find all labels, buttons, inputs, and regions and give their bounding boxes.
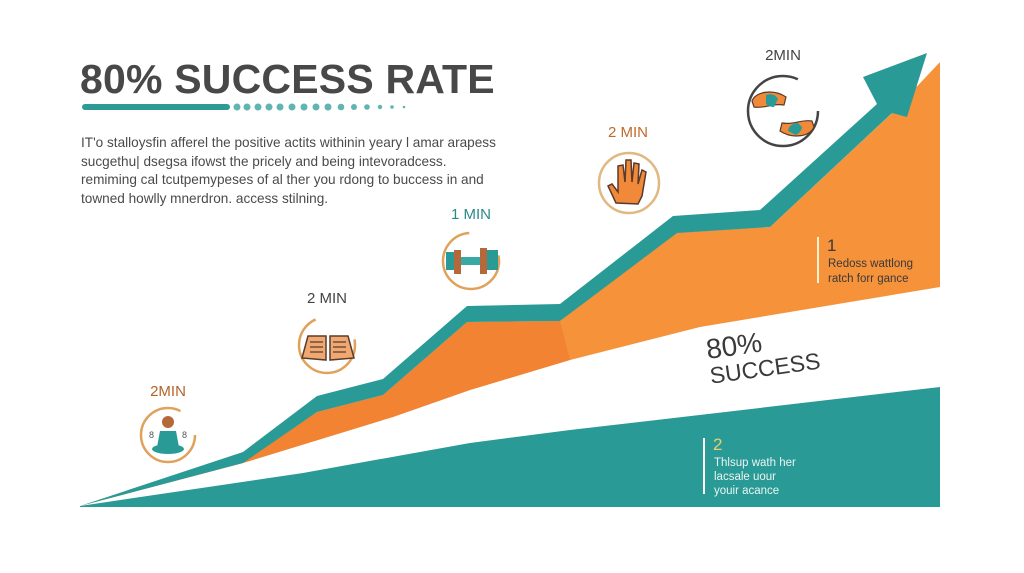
icon: meditation: 8: [182, 430, 187, 440]
callout 1: 1: [827, 236, 836, 255]
teal base band: [80, 387, 940, 507]
icon: hand: 2 MIN: [608, 124, 648, 141]
callout 1: Redoss wattlong: [828, 258, 913, 270]
icon: dumbbell: [442, 206, 500, 290]
80% success label: SUCCESS: [708, 348, 822, 389]
icon: book: 2 MIN: [307, 290, 347, 307]
intro paragraph: remiming cal tcutpemypeses of al ther you rdong to buccess in and: [81, 172, 484, 187]
icon: meditation: 8: [149, 430, 154, 440]
80% success label: [704, 326, 822, 389]
icon: book: [298, 290, 356, 374]
icon: feet: [746, 47, 820, 148]
callout 2: 2: [713, 435, 722, 454]
orange darker left part: [80, 321, 570, 506]
intro paragraph: [81, 135, 496, 206]
icon: meditation: [140, 383, 196, 464]
intro paragraph: towned howlly mnerdron. access stilning.: [81, 191, 328, 206]
teal arrow: [80, 53, 927, 506]
title: 80% SUCCESS RATE: [80, 56, 495, 102]
dotted underline bar: [82, 104, 406, 110]
callout 2: lacsale uour: [714, 471, 776, 483]
callout 1: ratch forr gance: [828, 272, 909, 284]
callout 2: [703, 435, 796, 497]
callout 1: [817, 236, 913, 284]
callout 2: youir acance: [714, 485, 779, 497]
intro paragraph: sucgethu| dsegsa ifowst the pricely and being intevoradcess.: [81, 154, 446, 169]
callout 2: Thlsup wath her: [714, 457, 796, 469]
intro paragraph: IT'o stalloysfin afferel the positive actits withinin yeary l amar arapess: [81, 135, 496, 150]
icon: dumbbell: 1 MIN: [451, 206, 491, 223]
80% success label: 80%: [704, 326, 764, 365]
icon: meditation: 2MIN: [150, 383, 186, 400]
icon: hand: [598, 124, 660, 214]
icon: feet: 2MIN: [765, 47, 801, 64]
orange area: [80, 62, 940, 506]
